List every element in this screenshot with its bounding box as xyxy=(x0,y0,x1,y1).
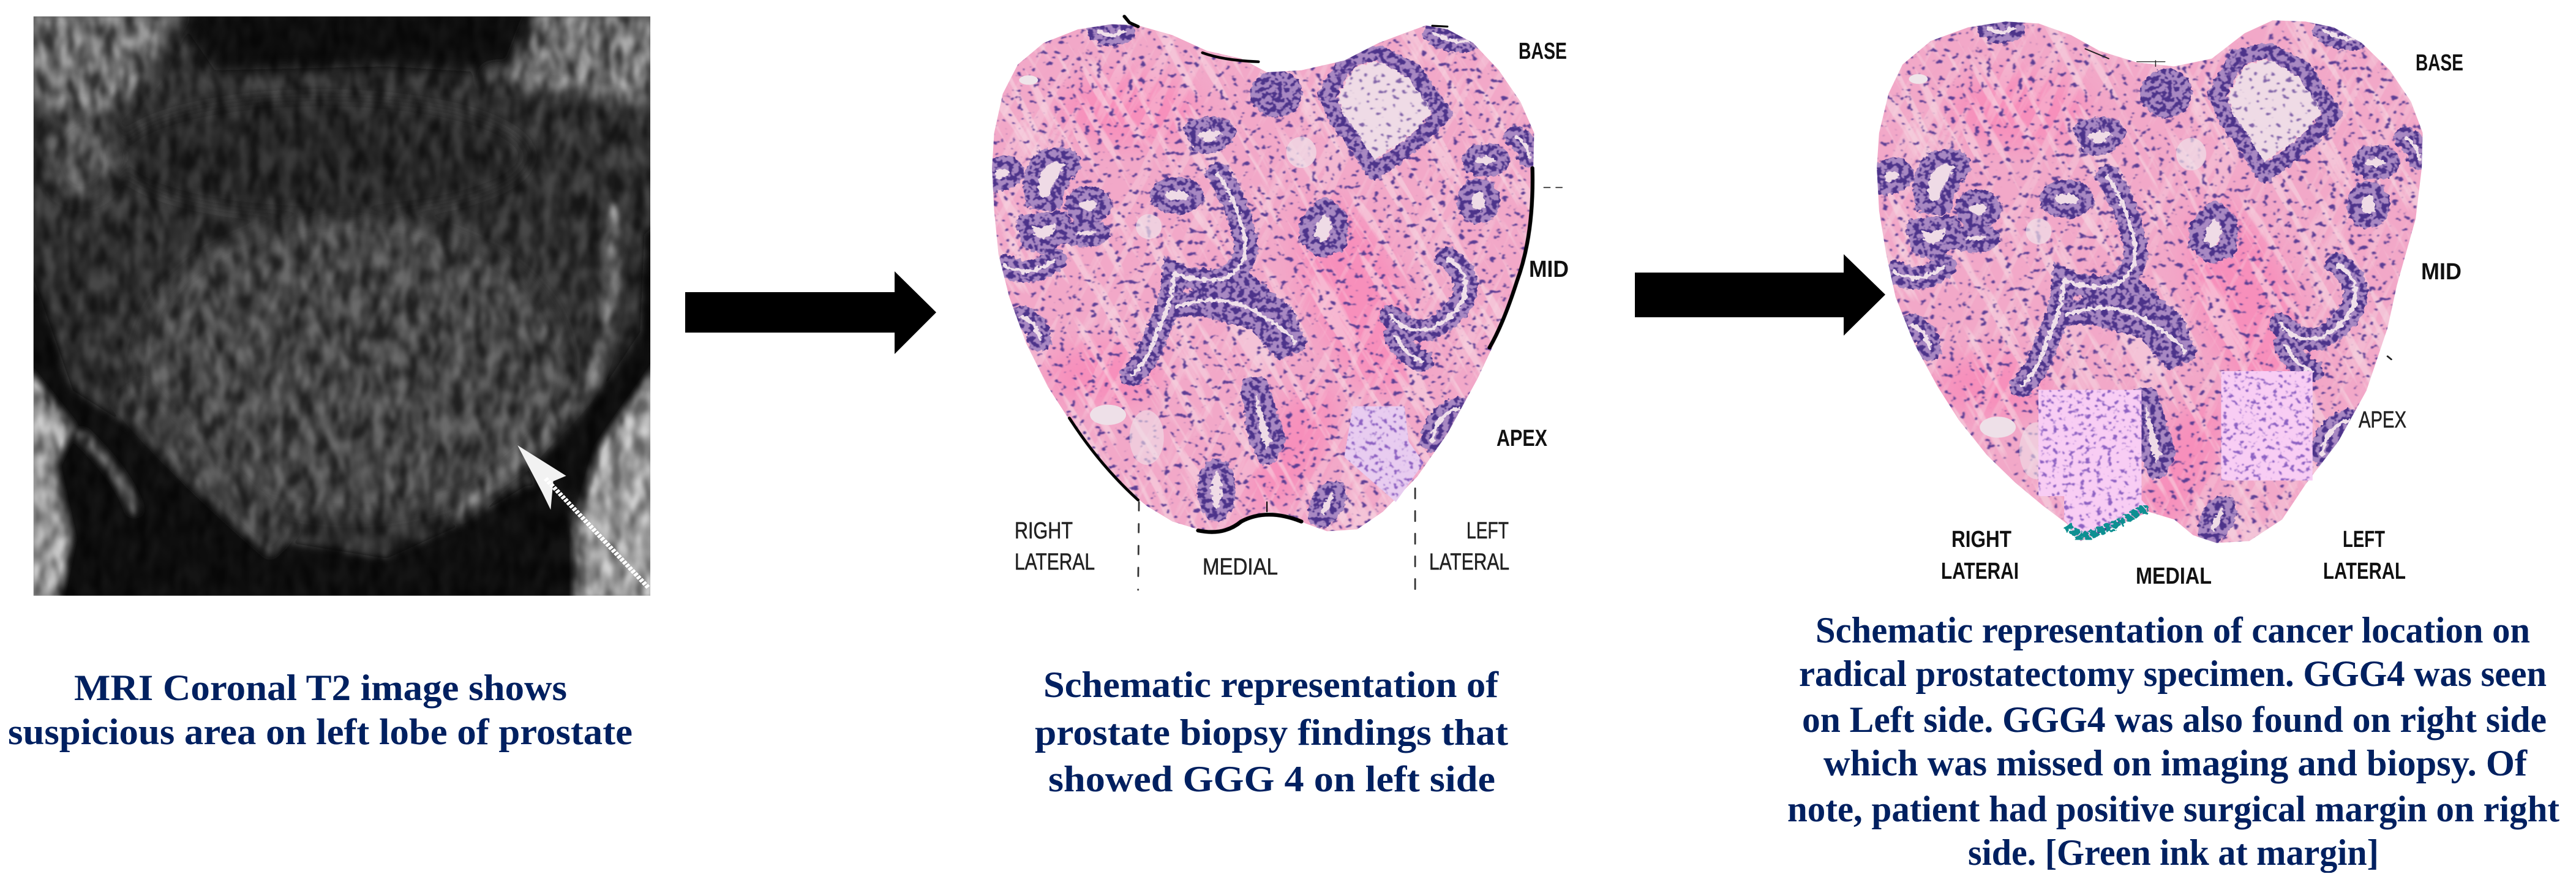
labels: biopsy schematic xyxy=(1015,39,1569,580)
panel: MRI coronal T2 image xyxy=(26,8,661,601)
prostate histology tissue xyxy=(992,16,1534,534)
caption: prostatectomy: radical prostatectomy specimen. GGG4 was seen xyxy=(1799,654,2547,694)
labels: prostatectomy schematic: RIGHT xyxy=(1951,527,2011,552)
labels: biopsy schematic: LATERAL xyxy=(1015,549,1095,575)
labels: biopsy schematic: LATERAL xyxy=(1429,549,1509,575)
arrow: biopsy to prostatectomy xyxy=(1635,254,1885,336)
labels: prostatectomy schematic: MID xyxy=(2421,259,2461,285)
labels: biopsy schematic: MID xyxy=(1529,257,1569,282)
caption: prostatectomy: which was missed on imaging and biopsy. Of xyxy=(1823,743,2528,783)
cancer highlight: right side xyxy=(2038,390,2149,539)
caption: biopsy xyxy=(1035,665,1508,799)
inked margins xyxy=(1069,17,1566,590)
green ink at margin xyxy=(2067,507,2147,538)
caption: prostatectomy: side. [Green ink at margin] xyxy=(1968,832,2379,873)
caption: prostatectomy: Schematic representation of cancer location on xyxy=(1816,610,2530,650)
icon: white pointer arrow xyxy=(517,445,648,588)
labels: biopsy schematic: MEDIAL xyxy=(1203,554,1278,580)
labels: prostatectomy schematic: LEFT xyxy=(2343,527,2385,552)
labels: prostatectomy schematic xyxy=(1941,50,2463,589)
labels: prostatectomy schematic: BASE xyxy=(2416,50,2463,76)
caption: biopsy: Schematic representation of xyxy=(1043,665,1499,705)
caption: biopsy: showed GGG 4 on left side xyxy=(1048,759,1495,799)
labels: prostatectomy schematic: APEX xyxy=(2359,407,2406,433)
labels: biopsy schematic: LEFT xyxy=(1466,518,1509,544)
caption: prostatectomy: on Left side. GGG4 was also found on right side xyxy=(1802,699,2547,740)
caption: MRI xyxy=(8,668,633,752)
caption: MRI: suspicious area on left lobe of prostate xyxy=(8,712,633,752)
panel: biopsy schematic xyxy=(992,15,2422,590)
caption: MRI: MRI Coronal T2 image shows xyxy=(74,668,567,708)
labels: biopsy schematic: APEX xyxy=(1496,426,1548,451)
caption: prostatectomy xyxy=(1787,610,2559,873)
panel: radical prostatectomy schematic xyxy=(1877,20,2463,873)
biopsy lesion highlight xyxy=(1344,406,1424,502)
labels: prostatectomy schematic: LATERAL xyxy=(2323,559,2406,584)
labels: biopsy schematic: RIGHT xyxy=(1015,518,1073,544)
cancer highlight: left side xyxy=(2221,371,2313,480)
margin marks xyxy=(2086,49,2391,360)
caption: prostatectomy: note, patient had positive surgical margin on right xyxy=(1787,789,2559,829)
labels: prostatectomy schematic: MEDIAL xyxy=(2136,563,2212,589)
caption: biopsy: prostate biopsy findings that xyxy=(1035,712,1508,753)
prostate histology tissue xyxy=(1877,20,2422,543)
arrow: MRI to biopsy xyxy=(685,271,936,354)
labels: prostatectomy schematic: LATERAI xyxy=(1941,559,2019,584)
labels: biopsy schematic: BASE xyxy=(1519,39,1567,64)
